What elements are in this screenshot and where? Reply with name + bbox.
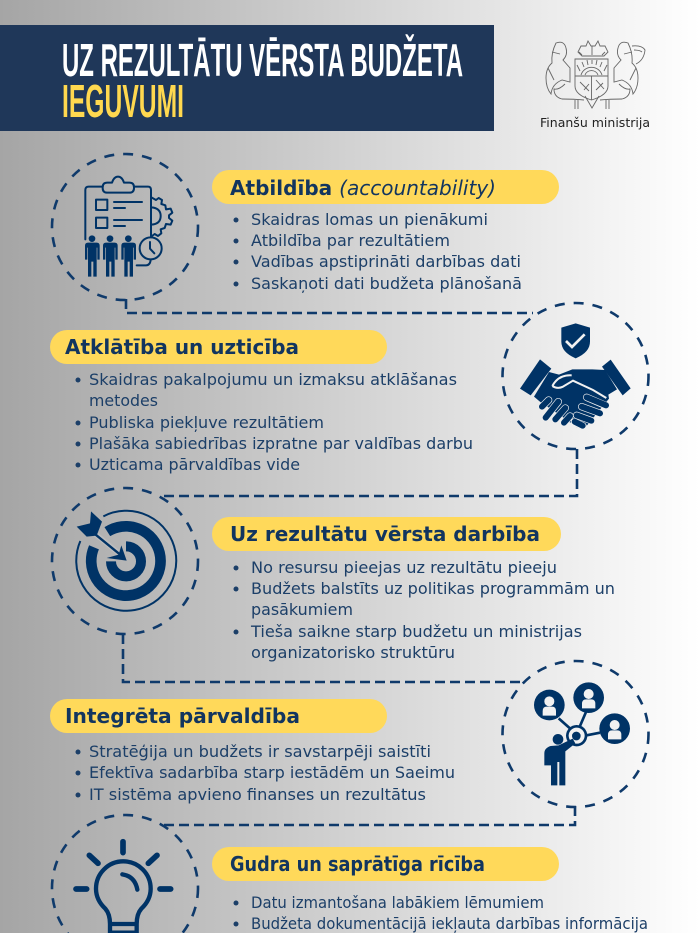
bullet list: metodes (89, 391, 158, 410)
bullet list: Uzticama pārvaldības vide (89, 455, 300, 474)
bullet list (234, 558, 615, 662)
bullet list: Atbildība par rezultātiem (251, 231, 450, 250)
bullet list: Efektīva sadarbība starp iestādēm un Saeimu (89, 763, 455, 782)
heading pill (212, 170, 559, 204)
panel: integrated governance (50, 661, 648, 807)
heading pill: Gudra un saprātīga rīcība (230, 852, 485, 876)
subtitle: IEGUVUMI (62, 75, 184, 127)
heading pill (212, 847, 559, 881)
bullet list (234, 893, 648, 933)
bullet list (76, 370, 473, 474)
bullet list: Vadības apstiprināti darbības dati (251, 252, 521, 271)
heading pill: Integrēta pārvaldība (65, 704, 300, 728)
bullet list: Plašāka sabiedrības izpratne par valdības darbu (89, 434, 473, 453)
ministry name: Finanšu ministrija (540, 115, 650, 130)
icon: person connecting network (502, 661, 648, 807)
icon: target with arrow (52, 488, 198, 634)
heading pill: Uz rezultātu vērsta darbība (230, 522, 540, 546)
connectors (123, 299, 577, 825)
bullet list: Skaidras lomas un pienākumi (251, 210, 488, 229)
icon: clipboard team (52, 154, 198, 300)
logo: coat of arms with ministry name (540, 41, 650, 130)
panel: transparency and trust (50, 303, 648, 474)
heading pill (212, 517, 561, 551)
panel: accountability (52, 154, 559, 300)
bullet list: No resursu pieejas uz rezultātu pieeju (251, 558, 557, 577)
heading pill: Atklātība un uzticība (65, 335, 299, 359)
header banner (0, 25, 494, 131)
bullet list (76, 742, 455, 804)
bullet list: Datu izmantošana labākiem lēmumiem (251, 893, 544, 912)
heading pill (50, 699, 387, 733)
panel: smart action (52, 815, 648, 933)
heading pill: Atbildība (accountability) (230, 176, 496, 200)
bullet list: Budžets balstīts uz politikas programmām un (251, 579, 615, 598)
bullet list: Saskaņoti dati budžeta plānošanā (251, 274, 522, 293)
bullet list: Publiska piekļuve rezultātiem (89, 413, 324, 432)
panel: results-oriented action (52, 488, 615, 662)
bullet list: organizatorisko struktūru (251, 643, 455, 662)
bullet list: Tieša saikne starp budžetu un ministrijas (250, 622, 582, 641)
bullet list (234, 210, 522, 293)
icon: handshake and shield (502, 303, 648, 449)
bullet list: Budžeta dokumentācijā iekļauta darbības informācija (251, 914, 648, 933)
heading pill (50, 330, 387, 364)
bullet list: Skaidras pakalpojumu un izmaksu atklāšanas (89, 370, 457, 389)
bullet list: IT sistēma apvieno finanses un rezultātus (89, 785, 426, 804)
bullet list: Stratēģija un budžets ir savstarpēji saistīti (89, 742, 431, 761)
bullet list: pasākumiem (251, 600, 353, 619)
icon: light bulb (52, 815, 198, 933)
